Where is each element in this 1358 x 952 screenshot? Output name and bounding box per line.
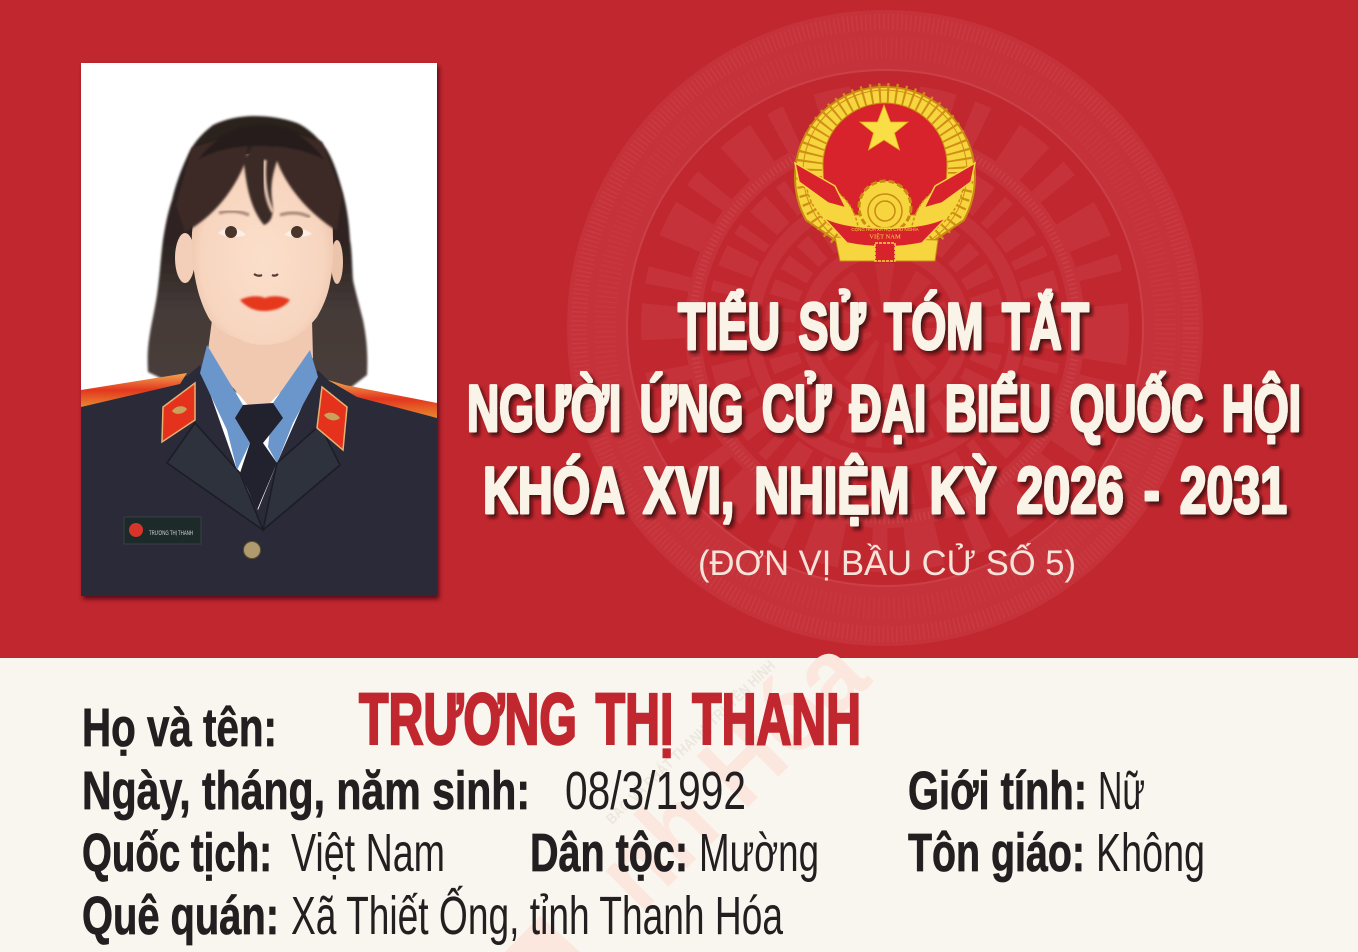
date of birth label: Ngày, tháng, năm sinh:	[82, 761, 530, 821]
face	[192, 152, 333, 345]
title line 1: TIỂU SỬ TÓM TẮT	[678, 289, 1089, 363]
title	[467, 289, 1301, 527]
right epaulet	[328, 380, 437, 418]
ethnicity label: Dân tộc:	[530, 823, 688, 883]
hair	[148, 116, 367, 392]
shirt collars	[200, 345, 318, 470]
gender: Nữ	[1098, 761, 1145, 821]
gender label: Giới tính:	[908, 761, 1087, 821]
lapels	[167, 423, 340, 530]
neck	[207, 320, 313, 405]
collar tab badges	[172, 406, 340, 420]
emblem text: CỘNG HÒA XÃ HỘI CHỦ NGHĨA	[851, 226, 919, 232]
name tag: TRƯƠNG THỊ THANH	[149, 531, 193, 537]
subtitle: (ĐƠN VỊ BẦU CỬ SỐ 5)	[698, 543, 1076, 583]
full name: TRƯƠNG THỊ THANH	[359, 680, 861, 760]
right collar tab	[317, 387, 347, 450]
emblem star	[860, 105, 908, 150]
left epaulet	[81, 373, 187, 407]
emblem side ribbons	[795, 163, 975, 208]
emblem base	[835, 237, 938, 261]
hometown label: Quê quán:	[82, 886, 279, 946]
tie	[235, 403, 283, 510]
eyebrows	[219, 211, 310, 217]
watermark: nh Hóa	[574, 614, 891, 931]
ethnicity: Mường	[699, 823, 819, 883]
left collar tab	[162, 383, 195, 442]
date of birth: 08/3/1992	[565, 761, 746, 821]
personal details	[82, 680, 1205, 946]
emblem gear	[859, 181, 911, 233]
hair highlights	[264, 160, 273, 212]
header background panel	[0, 0, 1358, 658]
emblem banner	[823, 217, 947, 247]
button	[244, 542, 260, 558]
nationality: Việt Nam	[291, 823, 445, 883]
religion label: Tôn giáo:	[908, 823, 1085, 883]
nose	[254, 274, 278, 276]
nationality label: Quốc tịch:	[82, 823, 272, 883]
bronze drum decorative background	[579, 22, 1191, 634]
name tag	[124, 517, 201, 544]
lips	[240, 296, 290, 311]
full name label: Họ và tên:	[82, 698, 277, 758]
ears	[175, 233, 195, 283]
national emblem: VIỆT NAM	[869, 232, 901, 240]
religion: Không	[1096, 823, 1205, 883]
emblem wreath	[795, 87, 975, 242]
fringe	[176, 125, 342, 232]
emblem rice sheaves	[806, 182, 964, 232]
national emblem	[795, 87, 975, 261]
hometown: Xã Thiết Ống, tỉnh Thanh Hóa	[291, 886, 784, 946]
emblem pillar	[875, 243, 895, 261]
emblem red field	[823, 103, 947, 215]
eyes	[218, 226, 312, 238]
watermark: BÁO VÀ PHÁT THANH, TRUYỀN HÌNH	[603, 657, 779, 828]
portrait photo	[81, 63, 437, 596]
information panel	[0, 658, 1358, 952]
jacket	[81, 365, 437, 596]
